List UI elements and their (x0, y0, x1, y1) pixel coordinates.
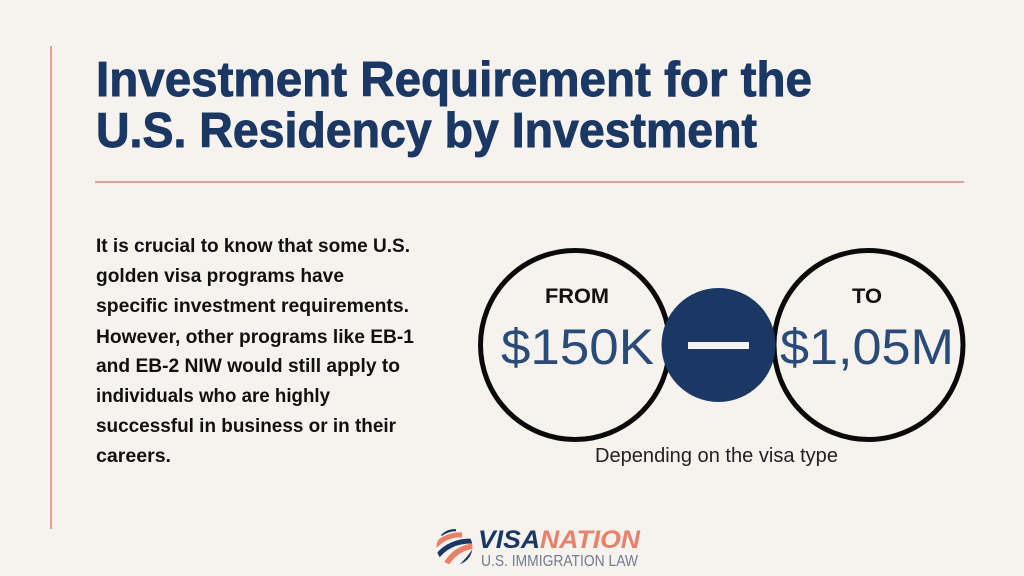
text block: investment explanation (96, 235, 414, 467)
to circle (774, 250, 963, 440)
logo (436, 529, 640, 566)
to circle: $1,05M (780, 319, 954, 375)
caption: Depending on the visa type (595, 445, 838, 467)
title: Investment Requirement for the (96, 53, 812, 107)
text block: investment explanation: It is crucial to know that some U.S. (96, 235, 410, 257)
from circle (480, 250, 670, 440)
text block: investment explanation: specific investment requirements. (96, 295, 409, 317)
text block: investment explanation: golden visa programs have (96, 265, 344, 287)
wordmark: VISANATION (478, 526, 641, 554)
text block: investment explanation: individuals who are highly (96, 385, 330, 407)
title (96, 53, 812, 158)
title: U.S. Residency by Investment (96, 104, 757, 158)
text block: investment explanation: careers. (96, 445, 171, 467)
to circle: TO (852, 285, 882, 308)
text block: investment explanation: and EB-2 NIW would still apply to (96, 355, 400, 377)
text block: investment explanation: However, other programs like EB-1 (96, 326, 414, 348)
dash circle (662, 288, 776, 402)
range diagram (480, 250, 963, 440)
tagline: U.S. IMMIGRATION LAW (481, 553, 639, 570)
icon: striped globe (436, 529, 472, 564)
text block: investment explanation: successful in business or in their (96, 415, 396, 437)
from circle: $150K (501, 319, 654, 375)
from circle: FROM (545, 285, 609, 308)
